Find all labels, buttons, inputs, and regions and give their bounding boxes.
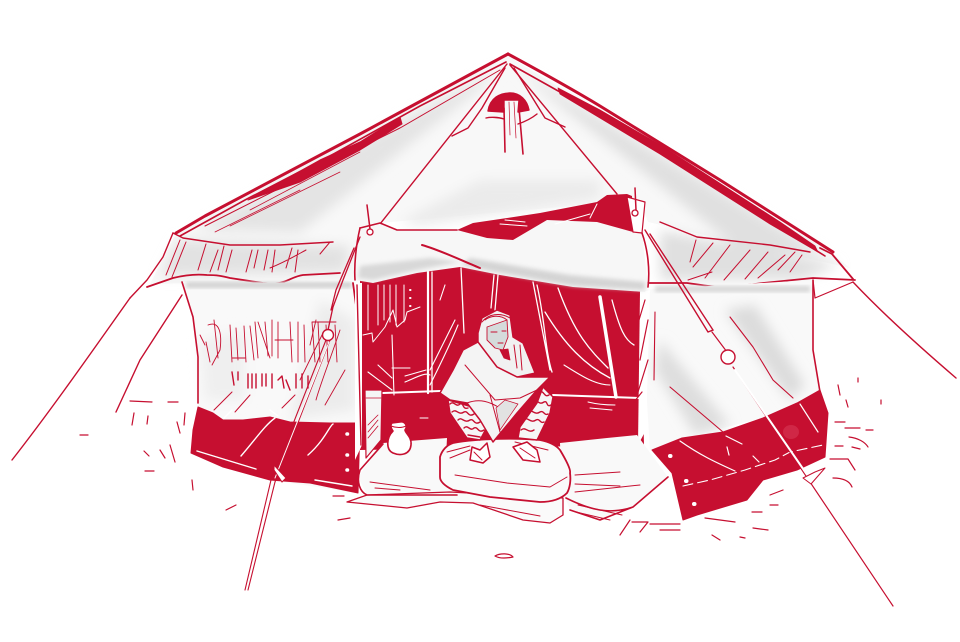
- cushions: [347, 422, 668, 523]
- sandals: [470, 443, 490, 463]
- floor pillow: [440, 439, 570, 502]
- face: [487, 320, 508, 350]
- woman: [440, 310, 553, 463]
- roof vent and door seams: [380, 64, 617, 224]
- crate: [365, 390, 382, 458]
- UNHCR lettering: [200, 320, 337, 390]
- ground marks: [80, 378, 881, 558]
- roof: [150, 54, 853, 284]
- interior red wall: [355, 265, 650, 460]
- left wall: [182, 282, 362, 493]
- hood and veil: [478, 310, 535, 377]
- shawl: [440, 342, 550, 442]
- water jar: [388, 422, 411, 454]
- left valance: [130, 233, 340, 298]
- legs: [448, 387, 553, 440]
- guy ropes and poles: [12, 230, 893, 606]
- awning: [355, 188, 649, 292]
- right wall: [640, 280, 828, 520]
- right valance: [647, 222, 956, 378]
